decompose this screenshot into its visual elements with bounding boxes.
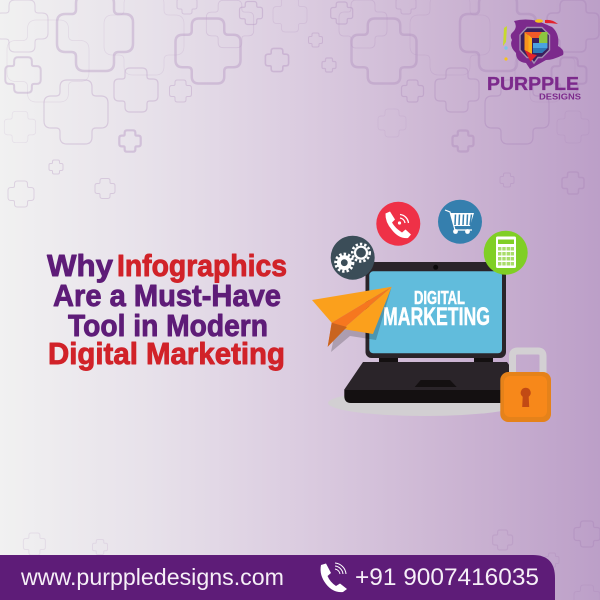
- footer bar: [0, 555, 555, 600]
- title: [47, 248, 287, 371]
- title line 1: Infographics: [117, 248, 287, 283]
- logo mark: paint splash with rainbow P: [503, 19, 563, 69]
- laptop touchpad: [415, 380, 457, 387]
- logo wordmark: PURPPLE: [487, 74, 579, 94]
- title line 3: Tool in Modern: [68, 308, 268, 343]
- laptop screen: [369, 271, 502, 353]
- screen heading: [383, 287, 490, 331]
- title line 2: Are a Must-Have: [53, 278, 281, 313]
- laptop hinges: [379, 357, 493, 363]
- laptop camera: [433, 265, 438, 270]
- screen heading: DIGITAL: [414, 287, 465, 308]
- screen heading: MARKETING: [383, 303, 490, 331]
- icon: calculator: [484, 231, 528, 275]
- paper plane: [312, 287, 392, 352]
- logo subline: DESIGNS: [539, 92, 582, 102]
- website address: www.purppledesigns.com: [20, 564, 284, 590]
- icon: gears: [331, 236, 375, 280]
- laptop: [344, 262, 530, 403]
- title line 1: Why: [47, 248, 114, 283]
- title line 1: [47, 248, 287, 283]
- padlock: [500, 351, 551, 422]
- laptop ground shadow: [328, 390, 522, 416]
- phone number: +91 9007416035: [355, 564, 539, 591]
- illustration: digital marketing laptop: [312, 200, 551, 422]
- icon: shopping cart: [438, 200, 482, 244]
- title line 4: Digital Marketing: [48, 336, 285, 371]
- laptop base: [344, 390, 530, 403]
- laptop lid: [366, 262, 506, 358]
- icon: phone: [376, 202, 420, 246]
- icon: footer phone: [321, 563, 347, 592]
- logo: Purpple Designs: [487, 19, 582, 102]
- laptop keyboard deck: [344, 362, 527, 390]
